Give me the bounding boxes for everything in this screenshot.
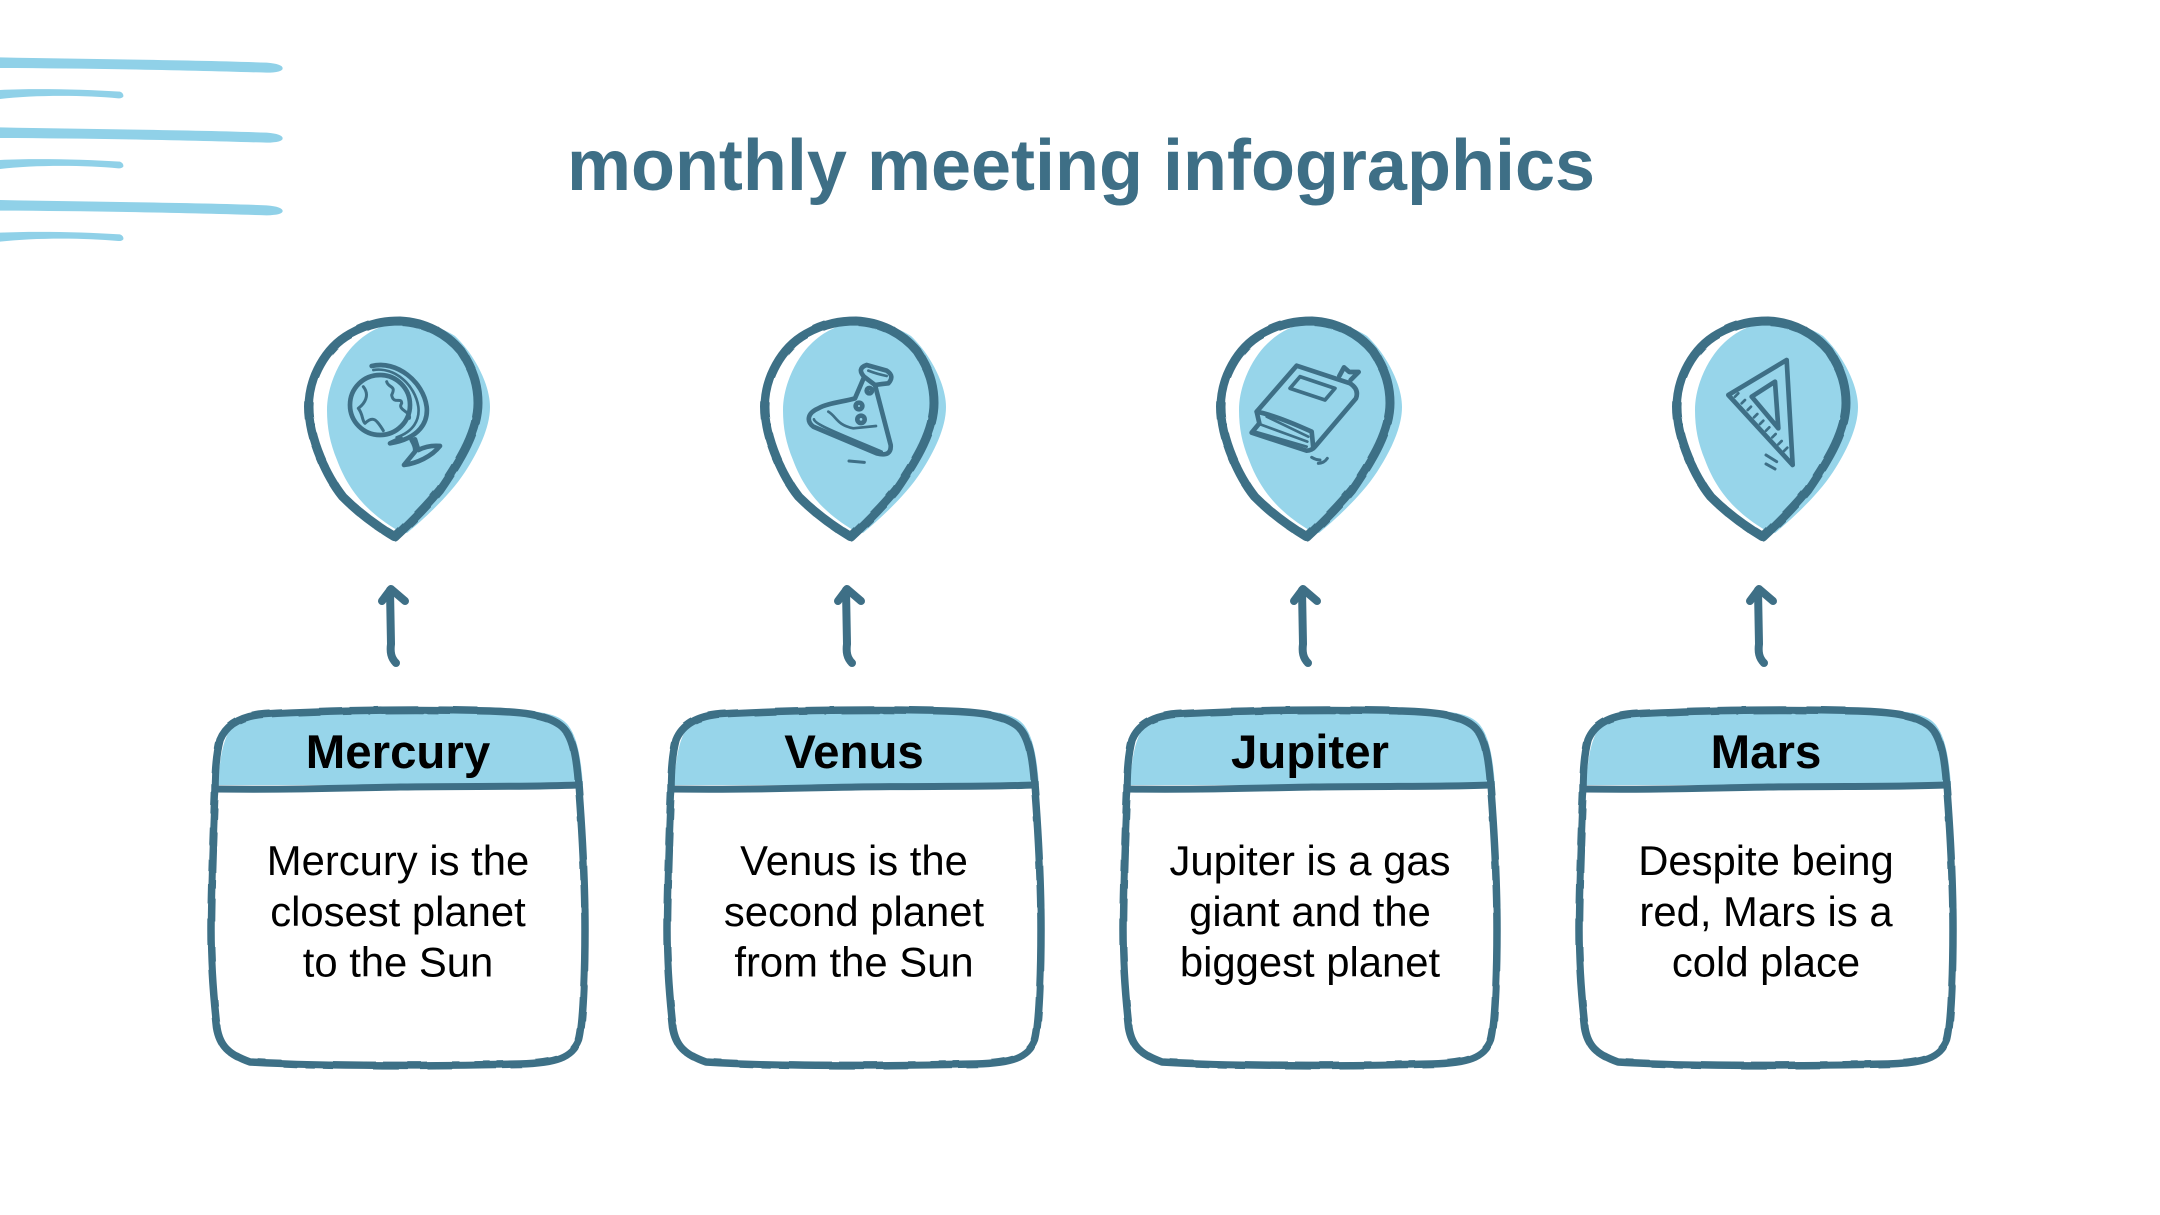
text: Venus description: second planet (724, 888, 985, 935)
panel: Venus (667, 709, 1041, 1065)
icon: globe (350, 365, 440, 465)
text: Mars description: cold place (1672, 938, 1860, 986)
pin: Venus flask (765, 321, 946, 537)
arrow: Mercury (382, 589, 405, 663)
text: Venus description: Venus is the (740, 837, 968, 884)
arrow: Venus (838, 589, 861, 663)
arrow: Jupiter (1294, 589, 1317, 663)
text: Mercury description: Mercury is the (267, 837, 529, 884)
icon: set square (1728, 360, 1793, 469)
text: Jupiter description: giant and the (1189, 888, 1431, 935)
heading: Mars: Mars (1711, 726, 1821, 779)
text: Mars description: red, Mars is a (1639, 888, 1893, 935)
text: Mercury description: closest planet (270, 888, 526, 935)
panel: Mercury (211, 709, 585, 1065)
panel: Mars (1579, 709, 1953, 1065)
text: Venus description: from the Sun (734, 938, 974, 986)
heading: Mercury: Mercury (306, 726, 491, 779)
heading: Venus: Venus (784, 726, 924, 779)
arrow: Mars (1750, 589, 1773, 663)
pin: Jupiter book (1221, 321, 1402, 537)
text: Mars description: Despite being (1638, 837, 1894, 884)
heading: Jupiter: Jupiter (1231, 726, 1389, 779)
icon: book (1252, 366, 1359, 463)
panel: Jupiter (1123, 709, 1497, 1065)
pin: Mars set square (1677, 321, 1858, 537)
text: Mercury description: to the Sun (303, 938, 493, 986)
pin: Mercury globe (309, 321, 490, 537)
icon: flask (809, 365, 891, 462)
title: monthly meeting infographics (567, 126, 1595, 206)
text: Jupiter description: biggest planet (1180, 938, 1441, 986)
decorative brush strokes (0, 57, 283, 242)
text: Jupiter description: Jupiter is a gas (1169, 837, 1451, 884)
